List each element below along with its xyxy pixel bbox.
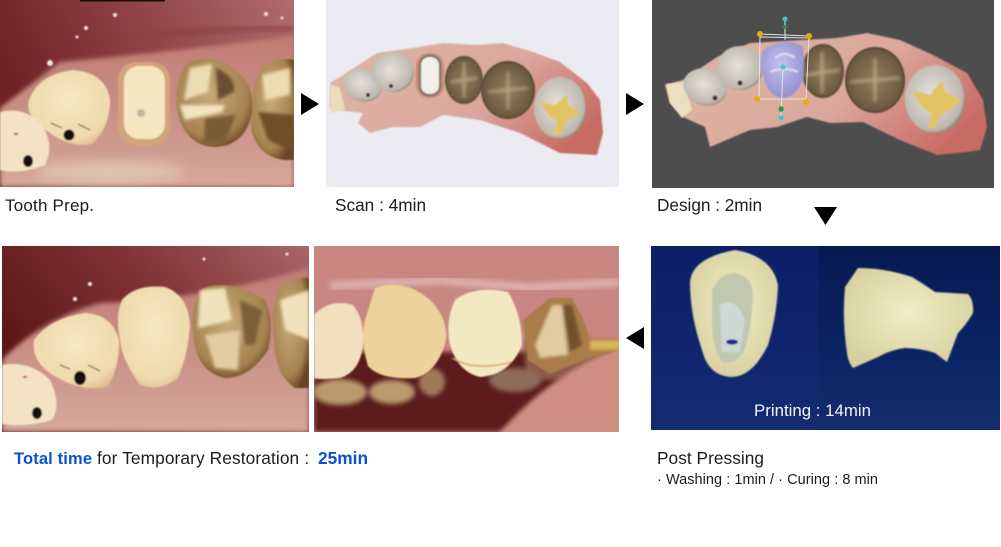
printed crown side view xyxy=(844,268,973,368)
caption: design: Design : 2min xyxy=(657,195,762,215)
purple design crown xyxy=(761,42,804,98)
panel: intraoral final photo xyxy=(313,246,625,440)
grey teeth xyxy=(338,52,414,107)
arrow: to printing xyxy=(814,207,837,225)
panel: printing photo xyxy=(651,246,1000,430)
gold crown left xyxy=(176,58,294,152)
tooth one with marker dot xyxy=(28,70,110,145)
summary: total time: 25min xyxy=(318,448,368,468)
gold crowns xyxy=(192,278,309,388)
dark gold teeth xyxy=(802,44,905,113)
grey teeth xyxy=(678,46,763,111)
panel: intraoral temporary restoration photo xyxy=(2,246,309,432)
lower teeth xyxy=(313,368,541,405)
label: printing time: Printing : 14min xyxy=(754,401,871,420)
arrow: to final xyxy=(626,327,644,349)
prepared tooth scan xyxy=(416,53,444,98)
printed crown inner view xyxy=(690,250,778,377)
panel: design image xyxy=(652,0,994,188)
molar with gold inlay xyxy=(905,65,965,133)
small tooth with marker dot xyxy=(2,364,57,425)
caption: scan: Scan : 4min xyxy=(335,195,426,215)
arrow: to design xyxy=(626,93,644,115)
caption: tooth prep: Tooth Prep. xyxy=(5,196,94,215)
molar with gold inlay xyxy=(534,77,586,139)
text block: post pressing: · Washing : 1min / · Curing : 8 min xyxy=(657,472,878,488)
summary: total time: for Temporary Restoration : xyxy=(97,448,309,468)
text block: post pressing xyxy=(657,448,878,488)
text block: post pressing: Post Pressing xyxy=(657,448,764,468)
gold crown side xyxy=(523,298,620,374)
small tooth with marker dot xyxy=(0,111,49,172)
upper left teeth xyxy=(314,285,446,379)
panel: tooth prep photo xyxy=(0,0,294,187)
temporary crown xyxy=(448,290,522,377)
design manipulators xyxy=(754,16,812,120)
tooth with marker dot xyxy=(34,313,119,388)
summary: total time xyxy=(14,448,368,468)
panel: scan image xyxy=(326,0,619,187)
gold crown right xyxy=(251,59,294,160)
prepared tooth xyxy=(118,62,170,146)
summary: total time: Total time xyxy=(14,450,92,468)
dark gold teeth xyxy=(445,56,535,119)
temporary crown xyxy=(118,287,190,387)
arrow: to scan xyxy=(301,93,319,115)
